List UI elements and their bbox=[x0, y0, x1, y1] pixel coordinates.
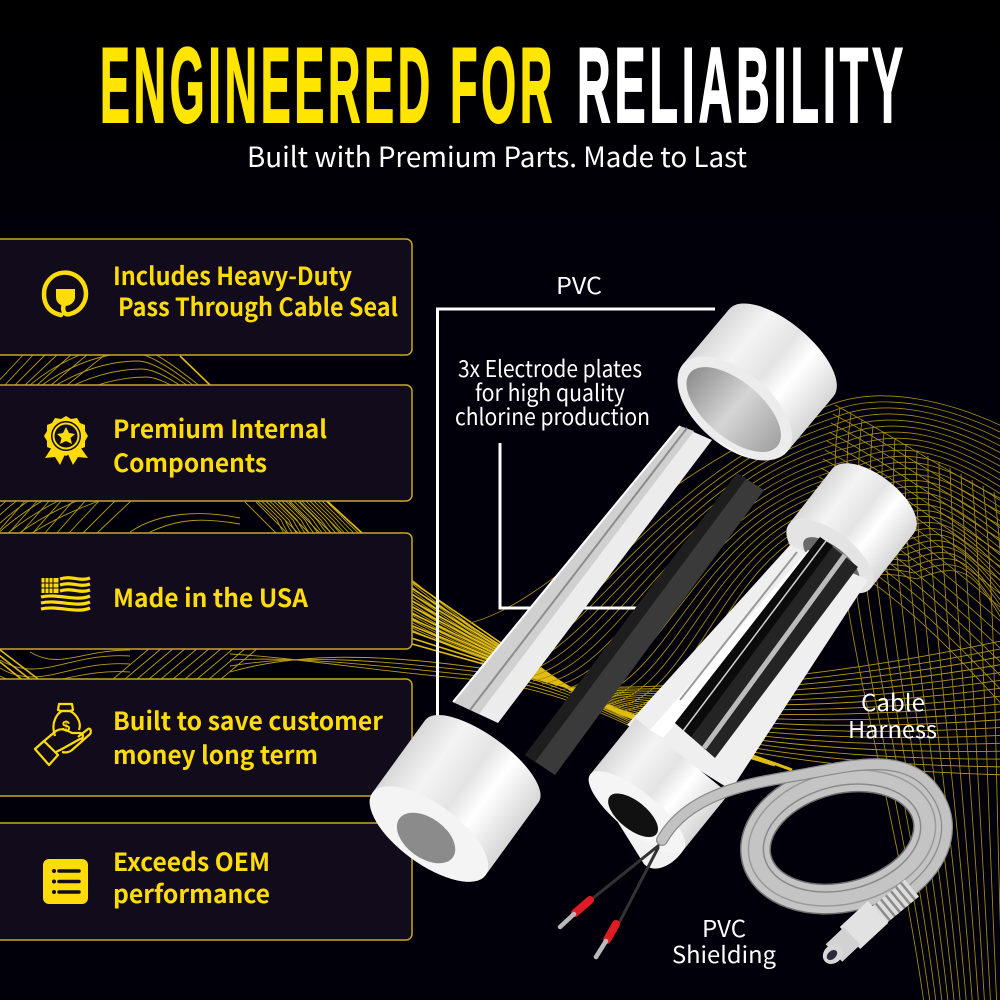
label: electrode plates bbox=[455, 350, 650, 432]
label: cable harness: Harness bbox=[848, 711, 937, 745]
label: PVC: PVC bbox=[556, 267, 602, 301]
bracket: electrode plates bbox=[500, 443, 650, 608]
text: save money: money long term bbox=[113, 736, 318, 772]
text: internal components: Premium Internal bbox=[113, 410, 327, 446]
icon: cable seal bbox=[44, 273, 86, 315]
subtitle: Built with Premium Parts. Made to Last bbox=[247, 136, 747, 176]
icon: hand with money bag: $ bbox=[62, 718, 71, 735]
text: cable seal: Includes Heavy-Duty bbox=[113, 257, 353, 293]
assembled cell bbox=[568, 449, 929, 878]
text: internal components bbox=[113, 410, 327, 480]
text: cable seal bbox=[113, 257, 398, 324]
label: electrode plates: 3x Electrode plates bbox=[458, 350, 642, 384]
icon: hand with money bag bbox=[35, 704, 91, 765]
panel: exceeds oem bbox=[0, 823, 412, 940]
text: made in usa: Made in the USA bbox=[113, 579, 309, 615]
bracket: PVC bbox=[438, 309, 715, 720]
cell top cap bbox=[774, 449, 929, 607]
connector bbox=[819, 888, 912, 968]
panel: save money bbox=[0, 679, 412, 796]
text: cable seal: Pass Through Cable Seal bbox=[118, 288, 398, 324]
cap opening bbox=[672, 351, 795, 468]
text: exceeds oem bbox=[113, 843, 270, 911]
text: save money bbox=[113, 702, 383, 772]
cable coil bbox=[734, 751, 950, 925]
label: PVC shielding: Shielding bbox=[672, 936, 776, 970]
label: PVC shielding bbox=[672, 910, 776, 970]
panel: made in usa bbox=[0, 533, 412, 649]
panel: internal components bbox=[0, 385, 412, 501]
icon: flag bbox=[41, 578, 90, 610]
label: electrode plates: for high quality bbox=[475, 374, 625, 408]
bottom cap bbox=[355, 699, 554, 899]
cell bottom cap bbox=[568, 718, 729, 878]
panel: cable seal bbox=[0, 239, 412, 355]
wires and terminals bbox=[560, 846, 658, 957]
label: electrode plates: chlorine production bbox=[455, 398, 650, 432]
cable harness bbox=[560, 751, 950, 968]
black electrode bar bbox=[525, 473, 764, 775]
cell electrode window bbox=[675, 537, 858, 758]
label: cable harness: Cable bbox=[861, 684, 925, 718]
label: cable harness bbox=[848, 684, 937, 745]
icon: list bbox=[43, 859, 88, 904]
text: internal components: Components bbox=[113, 444, 267, 480]
icon: award badge bbox=[44, 416, 88, 465]
cell tube bbox=[627, 545, 868, 790]
text: exceeds oem: performance bbox=[113, 875, 270, 911]
top cap bbox=[658, 286, 853, 481]
text: save money: Built to save customer bbox=[113, 702, 383, 738]
white PVC slat bbox=[453, 426, 712, 723]
cable grommet bbox=[601, 785, 665, 845]
cap plug bbox=[388, 802, 465, 874]
label: PVC shielding: PVC bbox=[702, 910, 746, 944]
text: exceeds oem: Exceeds OEM bbox=[113, 843, 270, 879]
